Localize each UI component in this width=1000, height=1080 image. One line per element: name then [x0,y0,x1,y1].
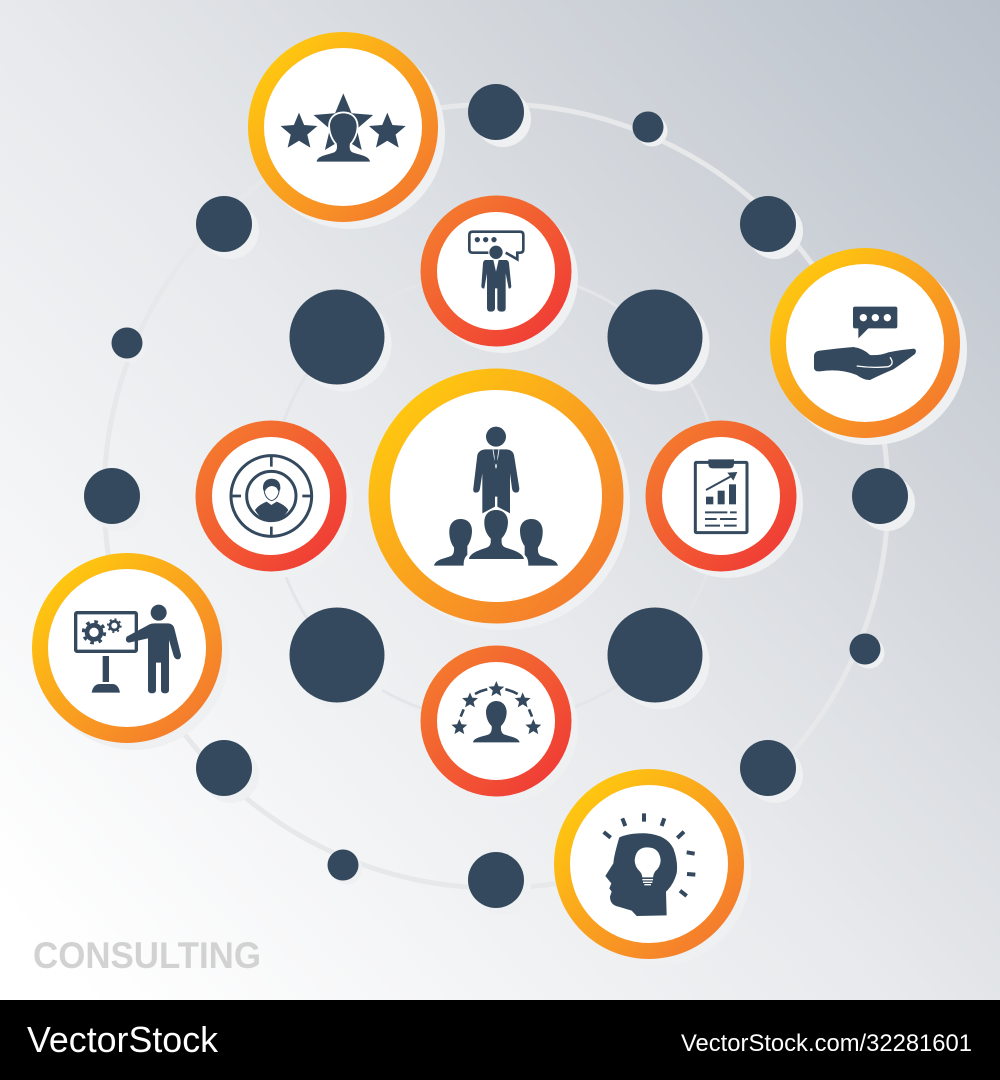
icon: head with light bulb [604,813,695,916]
badge: hand with message [770,248,967,445]
title: CONSULTING [33,935,261,976]
badge: target person [196,420,353,578]
outer connecting ring [104,104,888,888]
icon: clipboard with growth chart [695,459,747,533]
icon: person with stars [281,93,406,162]
badge: presenter at board [32,553,229,750]
icon: person with star arc [451,681,541,742]
icon: leader above team [434,427,558,566]
icon: hand holding speech bubble [814,307,916,380]
outer medium dots [84,84,915,915]
footer bar [0,1000,1000,1080]
badge: speaker with speech bubble [420,196,578,353]
badge: three star rating [248,32,445,229]
icon: presenter with gears [76,605,181,693]
icon: speaker [469,232,523,312]
badge: report clipboard [646,420,803,578]
icon: person in crosshair [231,456,312,536]
inner large dots [290,290,710,710]
badge: idea head [554,769,751,966]
footer logo: VectorStock [27,1019,219,1060]
inner connecting ring [271,271,721,721]
outer small dots [112,112,884,884]
footer image id: VectorStock.com/32281601 [681,1030,972,1057]
badge: center team leader [368,368,630,630]
badge: person under star arc [420,646,578,803]
